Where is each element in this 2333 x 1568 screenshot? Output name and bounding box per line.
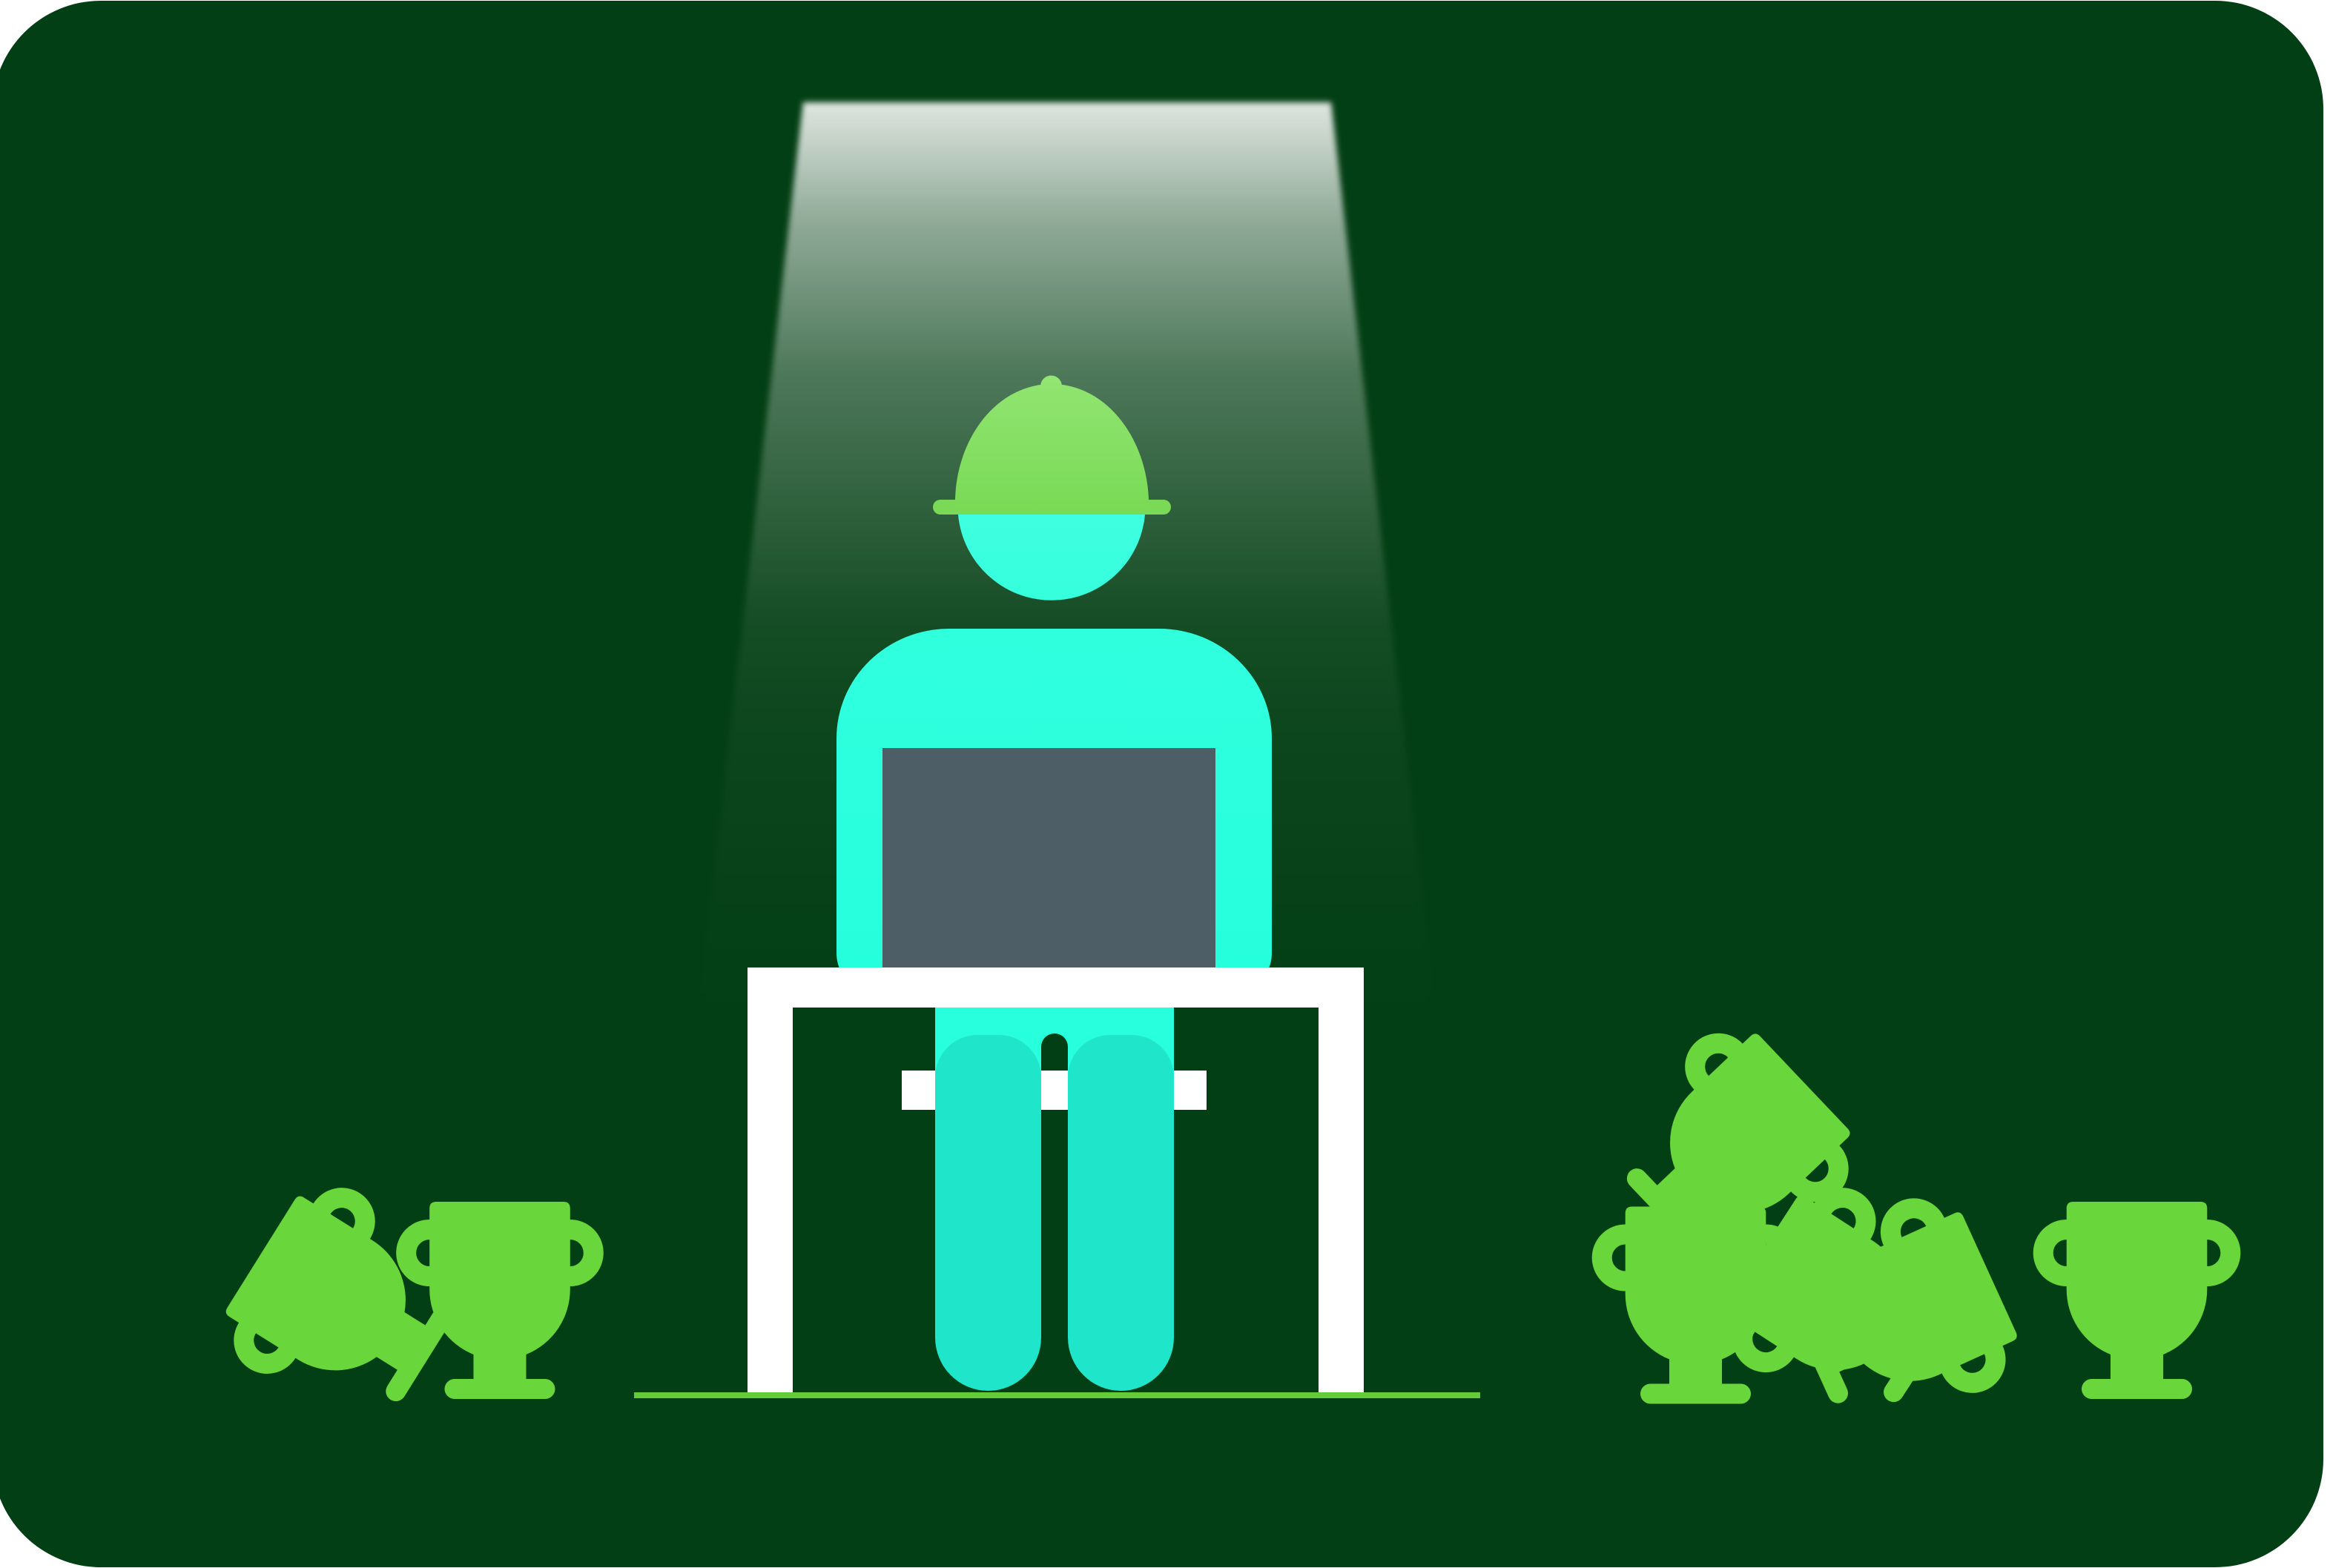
laptop screen xyxy=(882,748,1215,968)
chair bar xyxy=(902,1071,1207,1110)
right leg xyxy=(1068,1035,1174,1391)
desk xyxy=(748,967,1364,1392)
torso xyxy=(836,629,1272,973)
ground line xyxy=(634,1392,1480,1398)
icon: trophy pile, upright trophy xyxy=(1602,1207,1789,1404)
icon: upright trophy, far right xyxy=(2043,1202,2231,1399)
left leg xyxy=(935,1035,1041,1391)
worker figure xyxy=(836,375,1272,1391)
icon: upright trophy, left group xyxy=(406,1202,593,1399)
hips xyxy=(935,1005,1174,1090)
spotlight beam xyxy=(696,102,1437,1023)
icon: trophy pile, middle tilted trophy xyxy=(1710,1174,1978,1438)
icon: trophy pile, right tilted trophy xyxy=(1772,1189,2028,1441)
icon: tilted trophy, left group xyxy=(211,1174,478,1438)
helmet xyxy=(933,375,1171,515)
head xyxy=(958,515,1145,601)
icon: trophy pile, top trophy xyxy=(1597,1014,1868,1286)
